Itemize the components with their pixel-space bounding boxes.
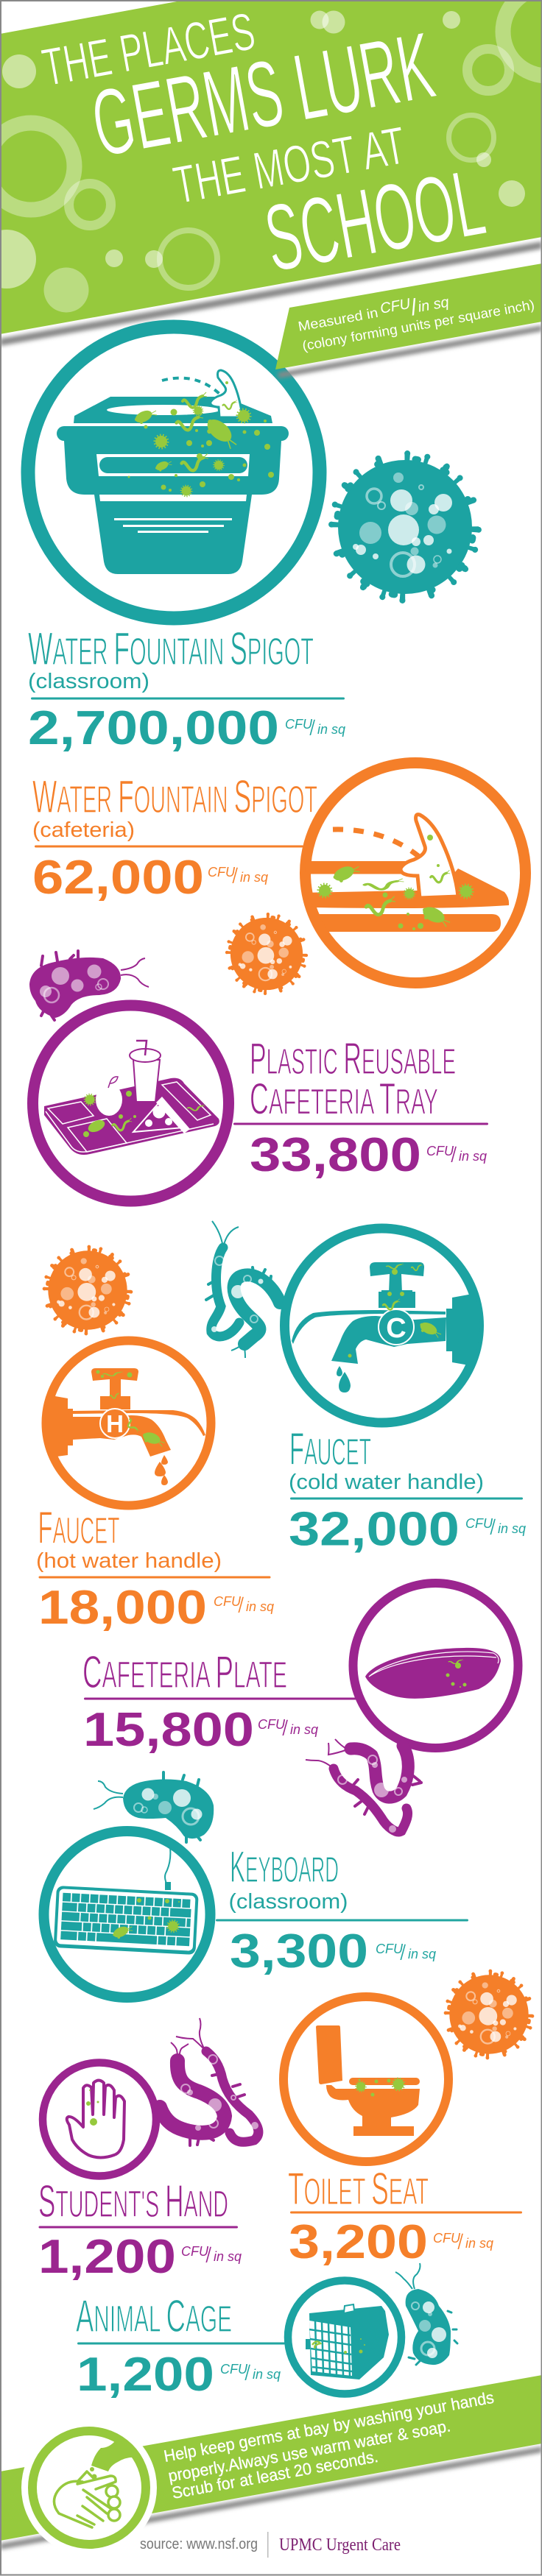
heading: TOILET SEAT bbox=[288, 2164, 429, 2215]
unit: / bbox=[490, 1515, 496, 1540]
tip text bbox=[162, 2388, 496, 2502]
unit: in sq bbox=[253, 2367, 281, 2382]
value: 62,000 bbox=[32, 850, 204, 904]
heading: FAUCET bbox=[289, 1424, 371, 1475]
unit bbox=[433, 2230, 493, 2254]
stat: water fountain classroom bbox=[28, 623, 345, 754]
source credit: source: www.nsf.org bbox=[140, 2536, 258, 2552]
location: (cold water handle) bbox=[289, 1471, 484, 1494]
icon: orange virus 2 bbox=[44, 1247, 131, 1334]
unit: in sq bbox=[465, 2236, 493, 2251]
title banner bbox=[0, 0, 542, 334]
unit: / bbox=[238, 1593, 244, 1618]
value: 3,300 bbox=[230, 1924, 368, 1978]
orange circle with hot water faucet bbox=[37, 1341, 211, 1506]
orange circle with toilet bbox=[284, 1997, 448, 2162]
value: 18,000 bbox=[38, 1580, 207, 1634]
value: 3,200 bbox=[289, 2215, 428, 2268]
units banner shadow bbox=[278, 325, 542, 378]
stat: water fountain cafeteria bbox=[32, 771, 317, 904]
unit: / bbox=[451, 1143, 457, 1167]
orange circle with fountain spigot bbox=[302, 762, 526, 983]
unit bbox=[220, 2361, 281, 2385]
unit bbox=[258, 1716, 318, 1741]
purple circle with cafeteria plate bbox=[353, 1583, 518, 1748]
unit: CFU bbox=[285, 717, 313, 732]
stat: faucet cold water handle bbox=[289, 1424, 526, 1556]
stat: toilet seat bbox=[288, 2164, 522, 2268]
rule bbox=[31, 698, 345, 699]
stat: plastic reusable cafeteria tray bbox=[233, 1034, 488, 1181]
location: (cafeteria) bbox=[32, 818, 135, 842]
heading: WATER FOUNTAIN SPIGOT bbox=[28, 623, 314, 675]
rule bbox=[290, 2211, 522, 2214]
title line 3: THE MOST AT bbox=[169, 116, 410, 216]
letter H: H bbox=[106, 1410, 124, 1437]
unit: CFU bbox=[433, 2231, 461, 2246]
fountain classroom circle bbox=[28, 327, 320, 618]
icon: orange virus bbox=[227, 914, 306, 994]
tip text: Help keep germs at bay by washing your hands bbox=[162, 2388, 496, 2466]
icon: orange virus 3 bbox=[446, 1971, 532, 2058]
rule bbox=[84, 1697, 356, 1700]
heading: CAFETERIA PLATE bbox=[82, 1647, 287, 1698]
unit: in sq bbox=[459, 1149, 487, 1164]
value: 15,800 bbox=[83, 1702, 254, 1756]
unit: / bbox=[232, 864, 239, 888]
unit: CFU bbox=[465, 1516, 493, 1531]
stat: animal cage bbox=[76, 2291, 285, 2401]
title banner shadow bbox=[0, 241, 542, 346]
footer banner bbox=[0, 2375, 542, 2541]
value: 33,800 bbox=[250, 1128, 421, 1181]
icon: purple worm germs bbox=[306, 1739, 421, 1833]
unit: / bbox=[244, 2361, 251, 2385]
icon: purple worm germs 2 bbox=[160, 2018, 258, 2145]
heading: ANIMAL CAGE bbox=[76, 2291, 232, 2342]
unit: in sq bbox=[240, 870, 268, 885]
icon: teal bacterium 2 bbox=[395, 2263, 457, 2365]
purple circle with cafeteria tray bbox=[32, 1005, 228, 1201]
units banner bbox=[275, 263, 542, 369]
heading: FAUCET bbox=[38, 1503, 119, 1554]
unit: / bbox=[205, 2243, 212, 2268]
icon: teal virus bbox=[331, 453, 479, 601]
unit bbox=[376, 1941, 436, 1965]
location: (classroom) bbox=[228, 1890, 348, 1914]
unit bbox=[208, 864, 268, 888]
footer banner shadow bbox=[0, 2446, 542, 2550]
value: 32,000 bbox=[289, 1501, 460, 1556]
units banner: (colony forming units per square inch) bbox=[301, 297, 535, 353]
unit: in sq bbox=[246, 1599, 274, 1614]
rule bbox=[77, 2342, 285, 2345]
units banner: CFU bbox=[379, 296, 412, 317]
rule bbox=[38, 2226, 238, 2229]
value: 1,200 bbox=[38, 2229, 176, 2283]
location: (hot water handle) bbox=[36, 1549, 222, 1573]
unit: in sq bbox=[498, 1521, 526, 1536]
heading: WATER FOUNTAIN SPIGOT bbox=[32, 771, 317, 823]
rule bbox=[290, 1497, 523, 1500]
logo: UPMC Urgent Care: UPMC Urgent Care bbox=[279, 2536, 401, 2555]
value: 2,700,000 bbox=[28, 701, 279, 754]
unit: / bbox=[457, 2230, 464, 2254]
purple circle with hand bbox=[43, 2062, 156, 2176]
unit: CFU bbox=[208, 865, 236, 880]
unit bbox=[181, 2243, 242, 2268]
teal circle with animal cage bbox=[288, 2280, 401, 2393]
unit: in sq bbox=[214, 2249, 242, 2264]
heading line 2: CAFETERIA TRAY bbox=[250, 1075, 438, 1123]
rule bbox=[216, 1919, 468, 1921]
stat: student's hand bbox=[38, 2176, 242, 2283]
unit: in sq bbox=[408, 1947, 436, 1961]
icon: teal worm germs bbox=[206, 1221, 280, 1358]
rule bbox=[35, 845, 303, 848]
unit bbox=[285, 716, 345, 740]
unit: CFU bbox=[220, 2362, 248, 2377]
unit: / bbox=[282, 1716, 289, 1741]
location: (classroom) bbox=[28, 670, 149, 693]
unit bbox=[426, 1143, 487, 1167]
unit: in sq bbox=[317, 722, 345, 737]
units banner: in sq bbox=[417, 294, 450, 316]
unit: CFU bbox=[181, 2244, 209, 2259]
heading: KEYBOARD bbox=[230, 1842, 339, 1892]
stat: keyboard bbox=[216, 1842, 468, 1978]
icon: hand washing bbox=[21, 2420, 157, 2555]
letter C: C bbox=[386, 1313, 406, 1344]
units banner: Measured in bbox=[297, 305, 379, 334]
icon: purple bacterium bbox=[29, 951, 149, 1020]
unit bbox=[465, 1515, 526, 1540]
unit: CFU bbox=[426, 1144, 454, 1158]
rule bbox=[38, 1577, 271, 1578]
unit: CFU bbox=[214, 1594, 242, 1609]
unit bbox=[214, 1593, 274, 1618]
stat: faucet hot water handle bbox=[36, 1503, 274, 1634]
unit: in sq bbox=[290, 1722, 318, 1737]
icon: classroom drinking fountain bbox=[57, 370, 289, 574]
stat: cafeteria plate bbox=[82, 1647, 356, 1756]
unit: CFU bbox=[258, 1717, 286, 1732]
heading: STUDENT'S HAND bbox=[38, 2176, 228, 2227]
unit: CFU bbox=[376, 1942, 404, 1956]
heading line 1: PLASTIC REUSABLE bbox=[250, 1034, 456, 1083]
unit: / bbox=[400, 1941, 406, 1965]
unit: / bbox=[309, 716, 316, 740]
units banner: / bbox=[409, 294, 420, 320]
rule bbox=[233, 1123, 488, 1125]
value: 1,200 bbox=[77, 2347, 214, 2401]
teal circle with cold water faucet bbox=[284, 1228, 486, 1423]
tip text: Scrub for at least 20 seconds. bbox=[170, 2447, 379, 2502]
tip text: properly.Always use warm water & soap. bbox=[166, 2416, 452, 2485]
icon: teal bacterium bbox=[94, 1772, 214, 1842]
teal circle with keyboard bbox=[44, 1831, 211, 1998]
